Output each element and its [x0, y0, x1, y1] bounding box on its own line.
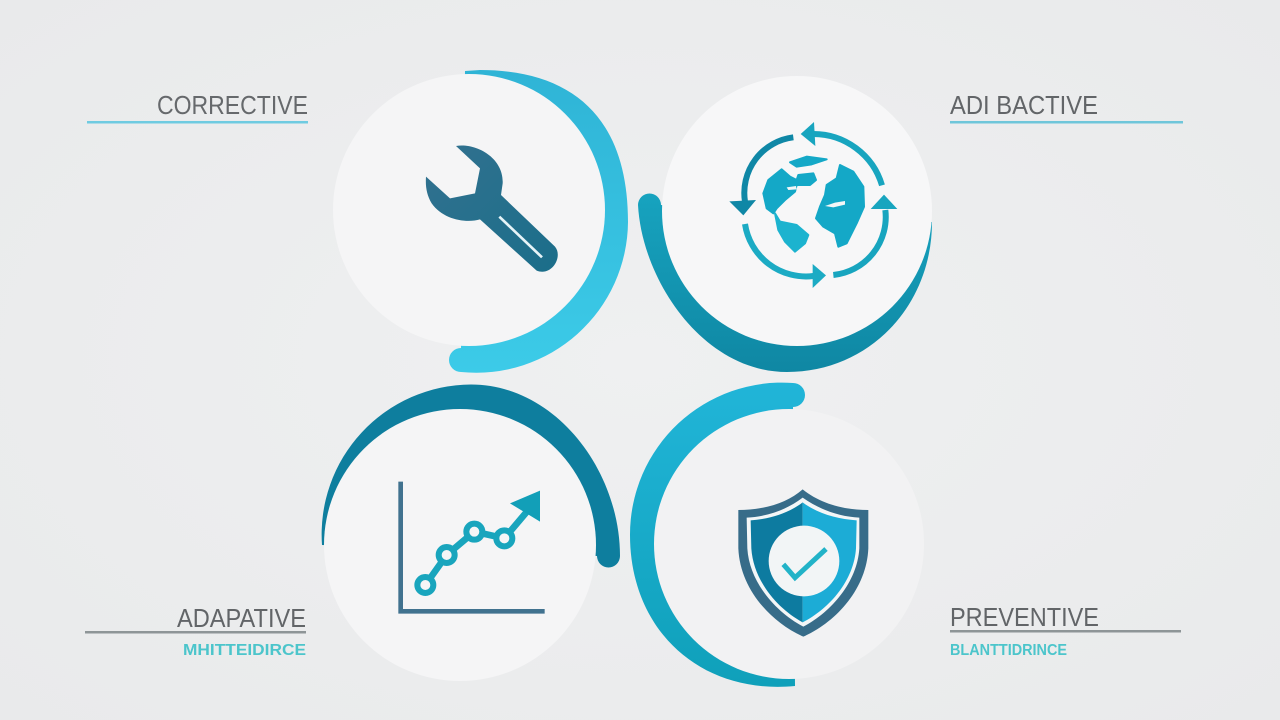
circle: adaptive [324, 409, 596, 681]
icon: globe continents [763, 157, 864, 252]
heading: top right: ADI BACTIVE [950, 90, 1098, 120]
heading: preventive: PREVENTIVE [950, 602, 1099, 632]
panel: corrective [87, 70, 628, 373]
icon: growth chart [401, 482, 545, 611]
heading: adaptive: ADAPATIVE [177, 603, 306, 633]
arc: top right [638, 194, 932, 372]
icon: shield [738, 489, 868, 637]
arc: preventive [630, 383, 805, 687]
circle: corrective [333, 74, 605, 346]
subheading: adaptive: MHITTEIDIRCE [183, 642, 306, 659]
rule: top right [950, 121, 1183, 124]
panel: preventive [630, 383, 1181, 687]
icon: globe with arrows [729, 122, 897, 288]
heading: corrective: CORRECTIVE [157, 90, 308, 120]
panel: adaptive top right [638, 76, 1183, 372]
icon: wrench [426, 146, 558, 272]
rule: adaptive [85, 631, 306, 634]
arc: adaptive [322, 384, 620, 568]
rule: corrective [87, 121, 308, 124]
circle: top right [662, 76, 932, 346]
circle: preventive [654, 409, 924, 679]
panel: adaptive [85, 384, 620, 681]
rule: preventive [950, 630, 1181, 632]
subheading: preventive: BLANTTIDRINCE [950, 642, 1067, 659]
arc: corrective [449, 70, 628, 373]
